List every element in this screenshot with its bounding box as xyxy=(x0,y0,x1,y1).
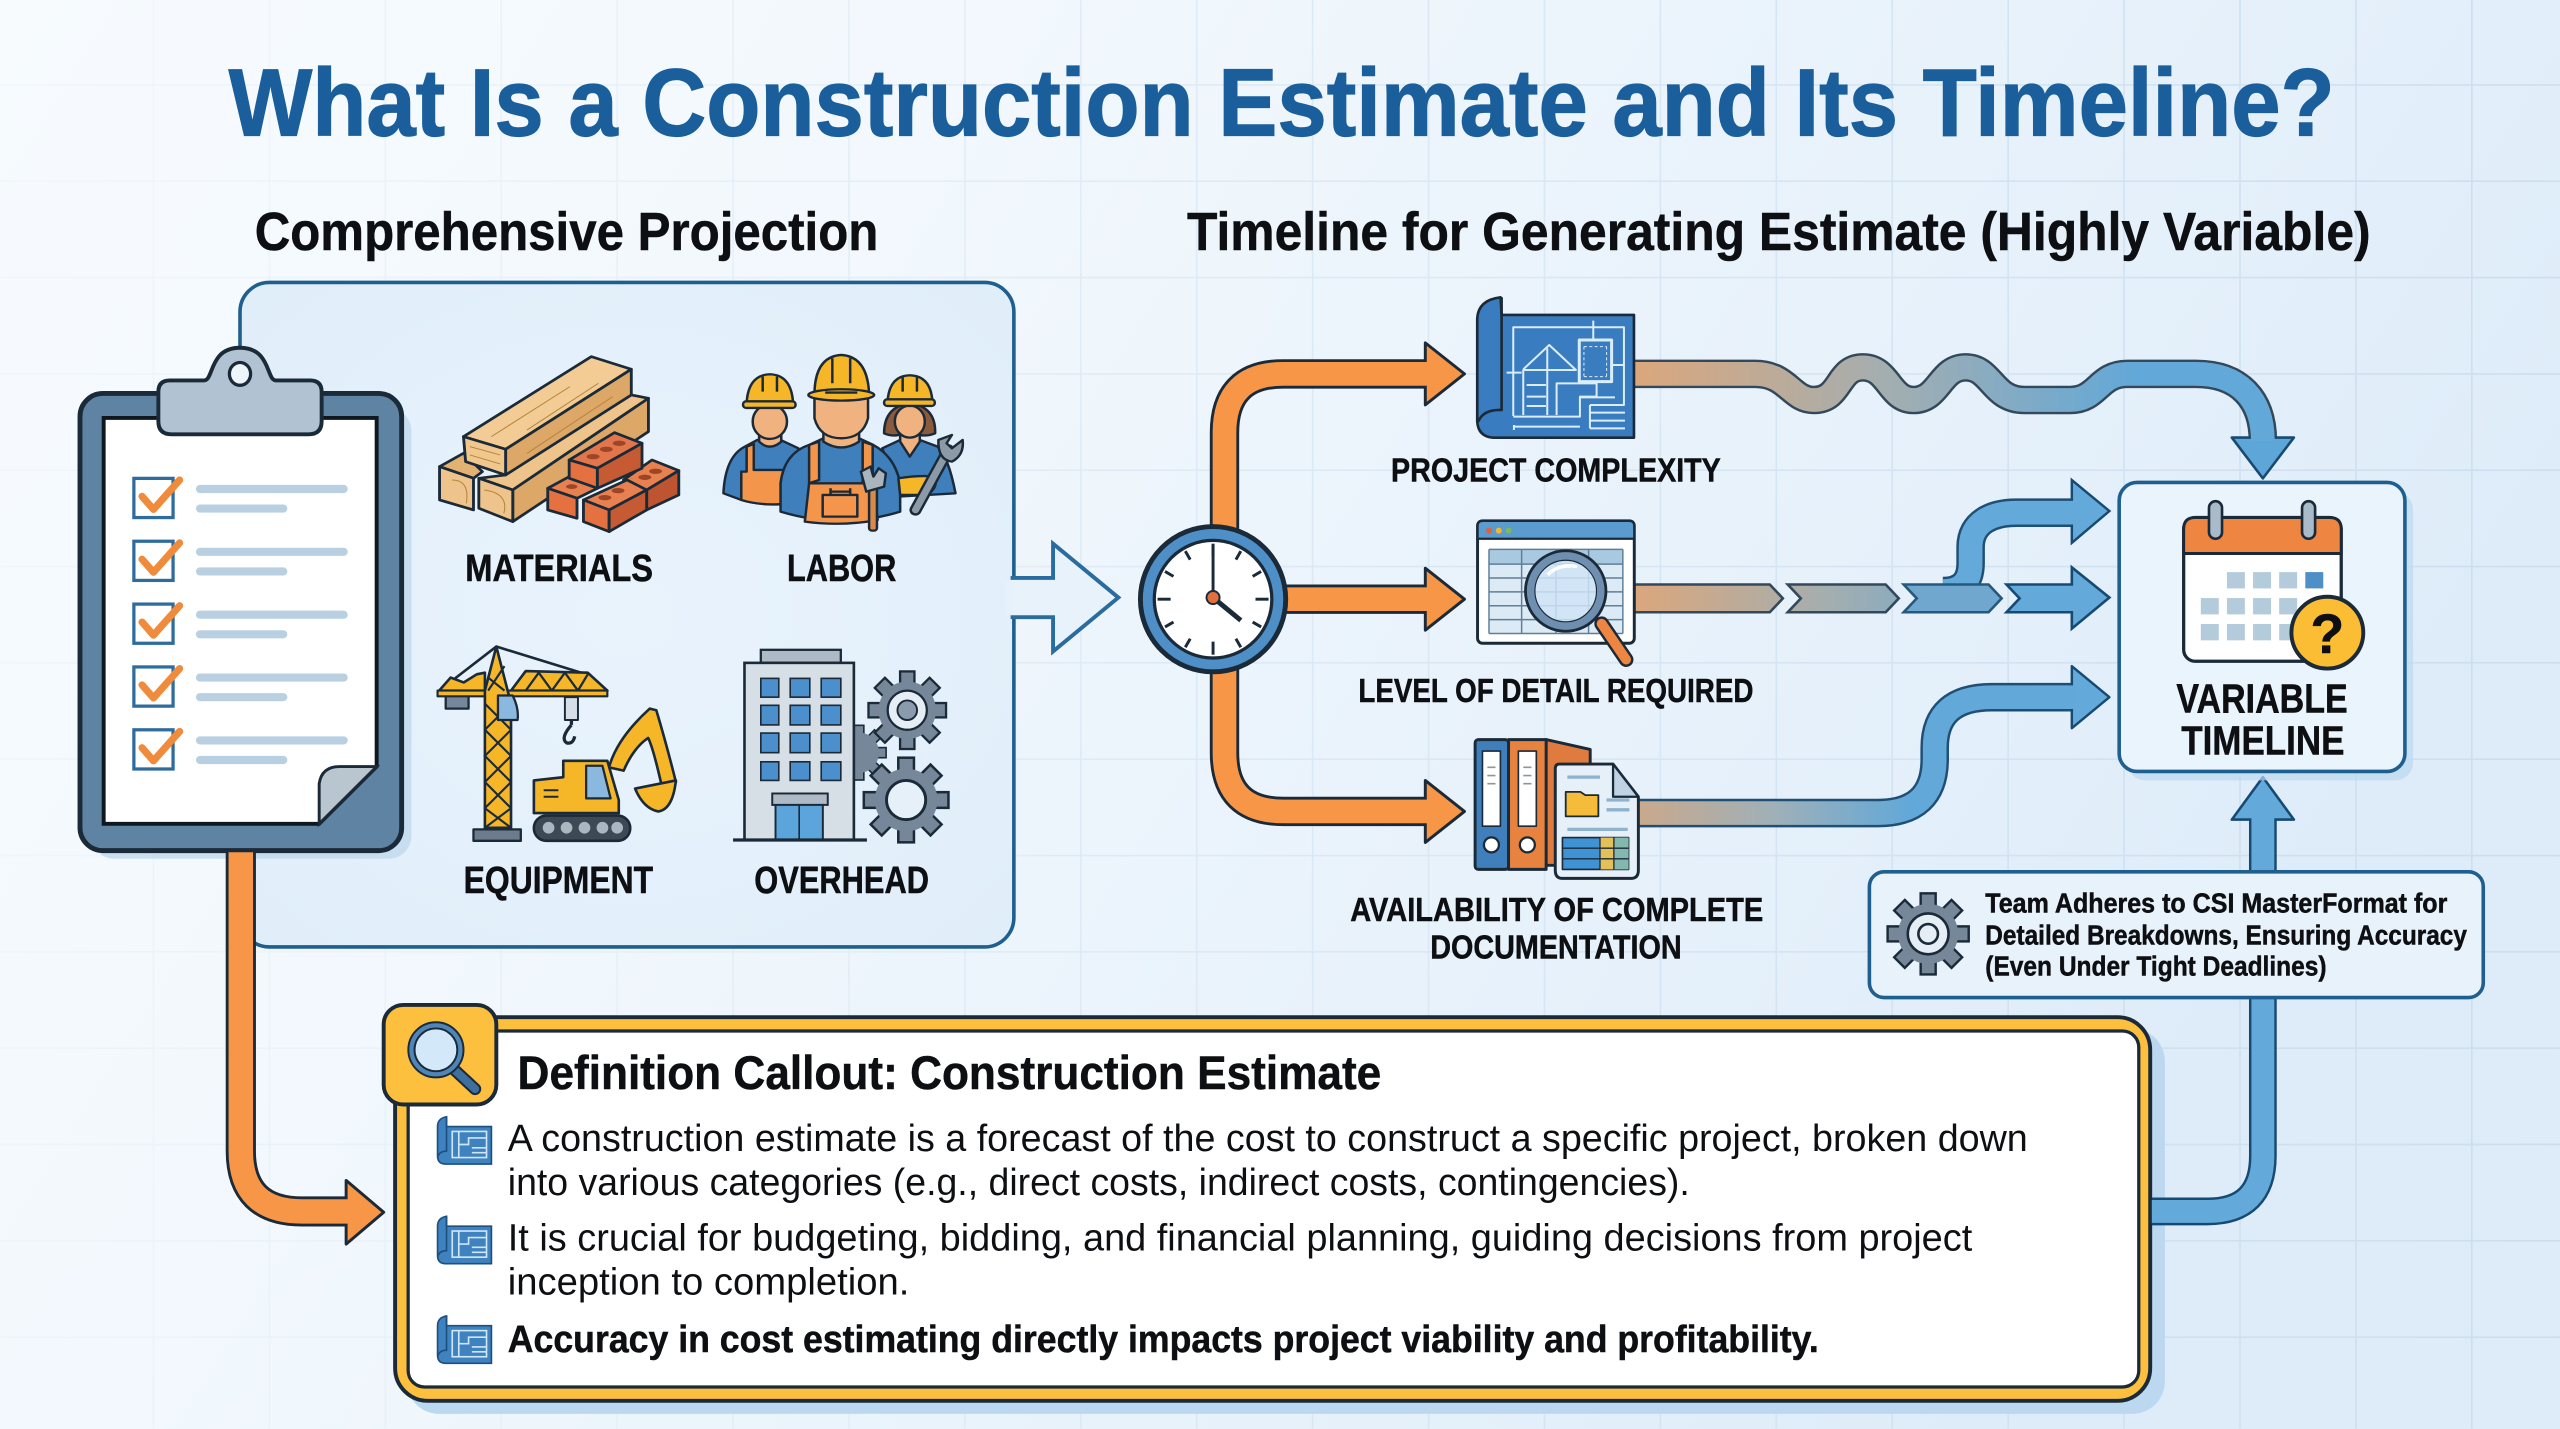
label: level of detail required: LEVEL OF DETAIL REQUIRED xyxy=(1358,673,1753,710)
icon: binders and document xyxy=(1475,740,1638,878)
icon: magnifier tab xyxy=(384,1005,496,1104)
panel: comprehensive projection xyxy=(240,282,1014,947)
label: equipment: EQUIPMENT xyxy=(464,859,653,901)
arrow: curved path from documentation xyxy=(1639,666,2109,813)
icon: blueprint bullet 2 xyxy=(438,1216,491,1264)
icon: overhead building and gears xyxy=(733,650,948,842)
hollow arrow: panel to clock xyxy=(1006,544,1118,651)
icon: gear xyxy=(1888,893,1969,974)
text: CSI note: Team Adheres to CSI MasterFormat for xyxy=(1985,888,2448,919)
icon: equipment crane and excavator xyxy=(438,647,676,841)
text: definition line 1: A construction estimate is a forecast of the cost to construct a specific project, broken down xyxy=(508,1117,2028,1159)
label: availability of complete documentation: AVAILABILITY OF COMPLETE xyxy=(1350,892,1763,929)
arrow: segmented path from level of detail xyxy=(1634,480,2109,629)
arrow: wavy path from project complexity to variable timeline xyxy=(1634,367,2294,478)
text: CSI note: Detailed Breakdowns, Ensuring Accuracy xyxy=(1985,919,2467,950)
callout: CSI MasterFormat note xyxy=(1869,872,2483,998)
label: variable timeline: TIMELINE xyxy=(2181,717,2344,763)
icon: clock xyxy=(1140,527,1286,672)
text: definition line 1: into various categories (e.g., direct costs, indirect costs, contingencies). xyxy=(508,1161,1690,1203)
text: definition line 2 xyxy=(508,1217,1973,1303)
title: What Is a Construction Estimate and Its Timeline? xyxy=(229,51,2335,157)
text: definition line 1 xyxy=(508,1117,2028,1203)
icon: blueprint bullet 1 xyxy=(438,1117,491,1164)
icon: spreadsheet with magnifier xyxy=(1478,521,1634,660)
label: variable timeline xyxy=(2176,676,2348,763)
text: CSI note xyxy=(1985,888,2467,982)
icon: materials lumber and bricks xyxy=(440,357,679,532)
icon: calendar with question mark xyxy=(2184,501,2363,669)
heading: comprehensive projection: Comprehensive Projection xyxy=(255,202,878,262)
heading: timeline for generating estimate: Timeline for Generating Estimate (Highly Variable) xyxy=(1187,202,2371,262)
text: CSI note: (Even Under Tight Deadlines) xyxy=(1985,951,2327,982)
panel: definition callout xyxy=(384,1005,2165,1414)
text: definition line 2: It is crucial for budgeting, bidding, and financial planning, guiding decisions from project xyxy=(508,1217,1973,1259)
label: project complexity: PROJECT COMPLEXITY xyxy=(1391,453,1721,490)
label: availability of complete documentation: DOCUMENTATION xyxy=(1430,929,1682,966)
label: availability of complete documentation xyxy=(1350,892,1763,966)
text: definition line 3: Accuracy in cost estimating directly impacts project viability and profitability. xyxy=(508,1318,1819,1361)
label: overhead: OVERHEAD xyxy=(754,859,929,901)
icon: labor workers xyxy=(723,355,963,531)
icon: blueprint project complexity xyxy=(1477,297,1634,438)
label: materials: MATERIALS xyxy=(465,547,653,589)
label: labor: LABOR xyxy=(787,547,896,589)
label: variable timeline: VARIABLE xyxy=(2176,676,2348,722)
icon: blueprint bullet 3 xyxy=(438,1316,491,1363)
arrow: clipboard to definition callout xyxy=(241,851,384,1244)
icon: clipboard checklist xyxy=(80,348,411,859)
panel: variable timeline xyxy=(2119,482,2413,780)
arrow: clock to level of detail xyxy=(1282,568,1464,630)
arrow: blue feedback from callout to variable timeline xyxy=(2152,777,2294,1211)
arrow: clock to documentation xyxy=(1224,661,1464,842)
heading: definition callout: Definition Callout: Construction Estimate xyxy=(518,1047,1381,1100)
icon: calendar with question mark: ? xyxy=(2310,603,2344,665)
checklist rows xyxy=(134,478,348,769)
text: definition line 2: inception to completion. xyxy=(508,1261,909,1303)
arrow: clock to project complexity xyxy=(1224,343,1464,539)
